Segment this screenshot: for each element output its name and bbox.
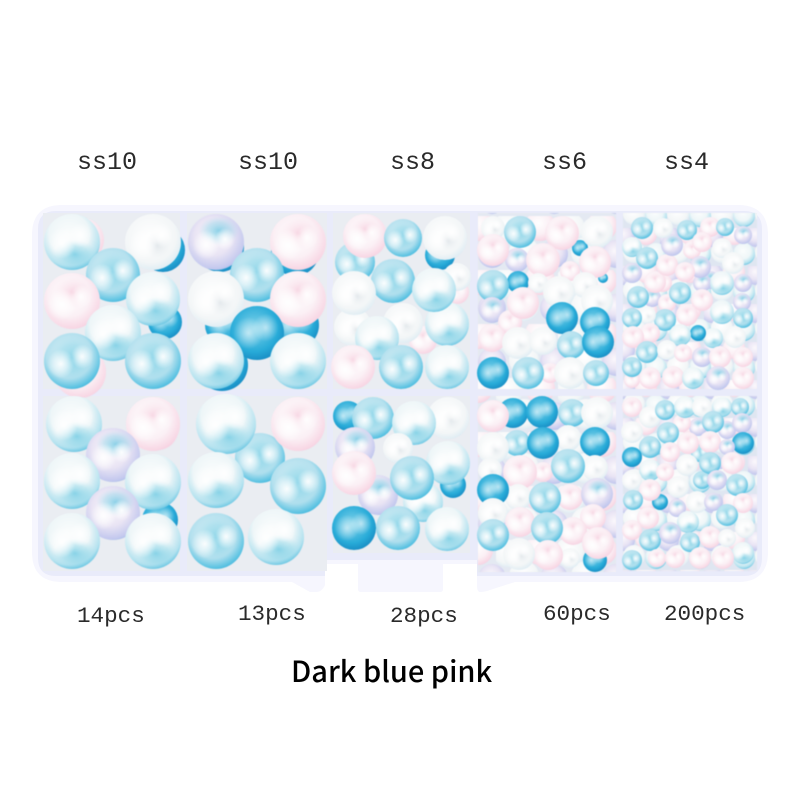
count label: 13pcs: 13pcs [238,601,306,627]
compartment: ss10 bottom second [188,394,326,569]
compartment: ss8 top [331,214,471,389]
size label: ss4: ss4 [664,148,709,177]
title: Dark blue pink [291,649,493,691]
compartment: ss4 top [622,213,757,390]
compartment: ss10 bottom left [44,396,181,569]
count label: 28pcs: 28pcs [390,603,458,629]
count label: 60pcs: 60pcs [543,601,611,627]
compartment: ss8 bottom [332,397,470,551]
compartment: ss10 top second [188,214,326,391]
count label: 14pcs: 14pcs [77,603,145,629]
compartment: ss4 bottom [621,396,757,571]
size label: ss10 second: ss10 [238,148,298,177]
compartment: ss10 top left [44,214,185,398]
count label: 200pcs: 200pcs [664,601,745,627]
compartment: ss6 top [477,213,616,389]
size label: ss10: ss10 [77,148,137,177]
box dividers [38,211,762,576]
compartment: ss6 bottom [477,396,616,572]
size label: ss6: ss6 [542,148,587,177]
box compartments [43,213,757,572]
size label: ss8: ss8 [390,148,435,177]
box outer shell [32,205,768,592]
